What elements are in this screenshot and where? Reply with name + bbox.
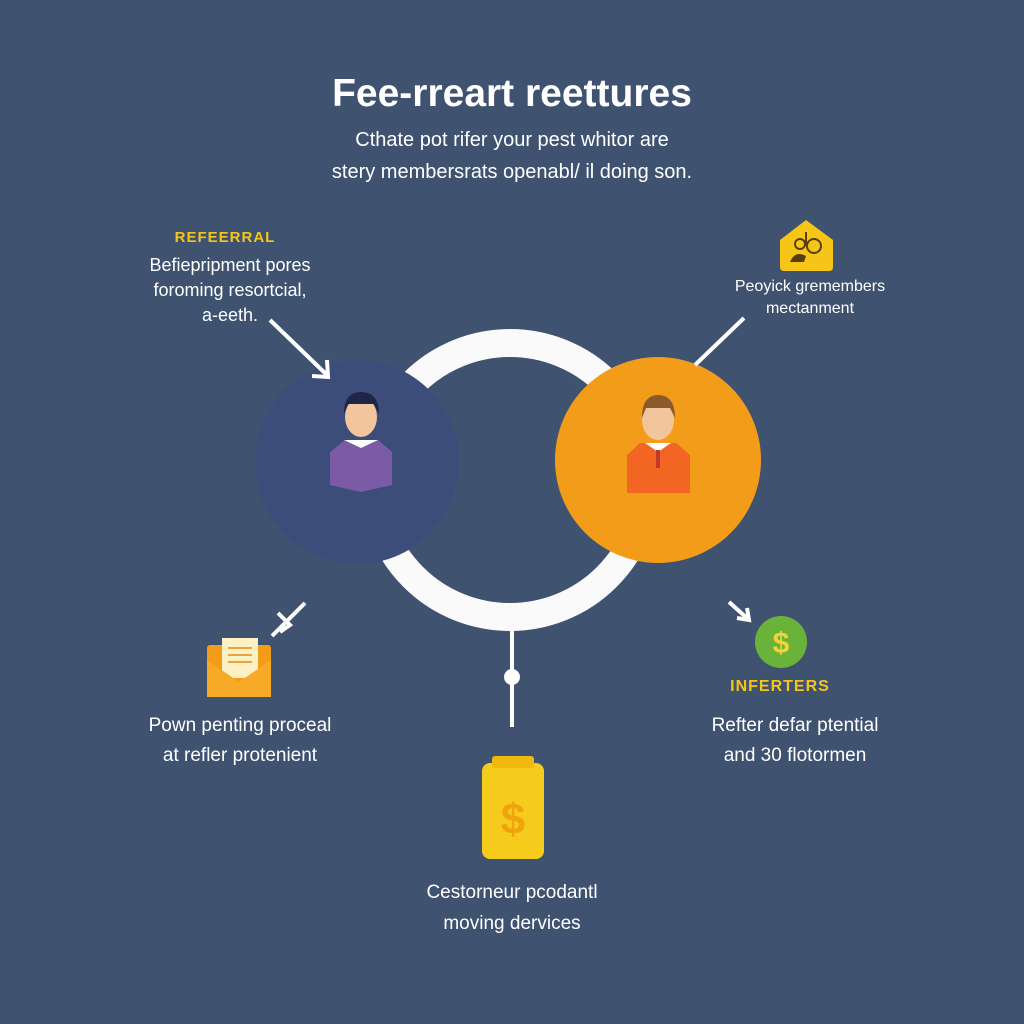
text: inferters description: Refter defar ptential xyxy=(712,715,878,736)
text: top right description xyxy=(735,278,885,317)
arrow: referral to blue xyxy=(270,320,328,377)
text: inferters description: and 30 flotormen xyxy=(724,745,866,766)
orange circle: referee xyxy=(555,357,761,563)
subtitle xyxy=(332,129,692,183)
arrow: to envelope xyxy=(272,603,305,636)
icon: person orange xyxy=(627,395,690,493)
text: referral description: Befiepripment pores xyxy=(149,255,311,275)
text: bottom description xyxy=(426,882,598,934)
text: referral description: foroming resortcial, xyxy=(153,280,307,300)
subtitle: stery membersrats openabl/ il doing son. xyxy=(332,161,692,183)
text: referral description xyxy=(149,255,311,325)
label: inferters heading: INFERTERS xyxy=(730,678,830,695)
icon: yellow money jar xyxy=(482,756,544,859)
icon: envelope xyxy=(207,638,271,697)
icon: green dollar coin: $ xyxy=(773,627,790,660)
icon: yellow house badge xyxy=(780,220,833,271)
text: bottom description: moving dervices xyxy=(443,913,581,934)
text: top right description: mectanment xyxy=(766,300,854,317)
blue circle: referrer xyxy=(255,360,459,564)
icon: yellow money jar: $ xyxy=(501,795,525,844)
stem xyxy=(504,630,520,727)
text: envelope description: Pown penting proceal xyxy=(149,715,331,736)
ring xyxy=(373,343,647,617)
text: envelope description: at refler protenient xyxy=(163,745,317,766)
icon: green dollar coin xyxy=(755,616,807,668)
text: bottom description: Cestorneur pcodantl xyxy=(426,882,598,903)
label: referral heading: REFEERRAL xyxy=(175,229,275,246)
text: top right description: Peoyick gremembers xyxy=(735,278,885,295)
text: envelope description xyxy=(149,715,331,766)
arrow: orange to top right xyxy=(695,318,744,365)
text: inferters description xyxy=(712,715,878,766)
title: Fee-rreart reettures xyxy=(332,72,692,115)
icon: person purple xyxy=(330,392,392,492)
text: referral description: a-eeth. xyxy=(202,305,258,325)
subtitle: Cthate pot rifer your pest whitor are xyxy=(355,129,669,151)
arrow: to dollar coin xyxy=(729,602,749,620)
